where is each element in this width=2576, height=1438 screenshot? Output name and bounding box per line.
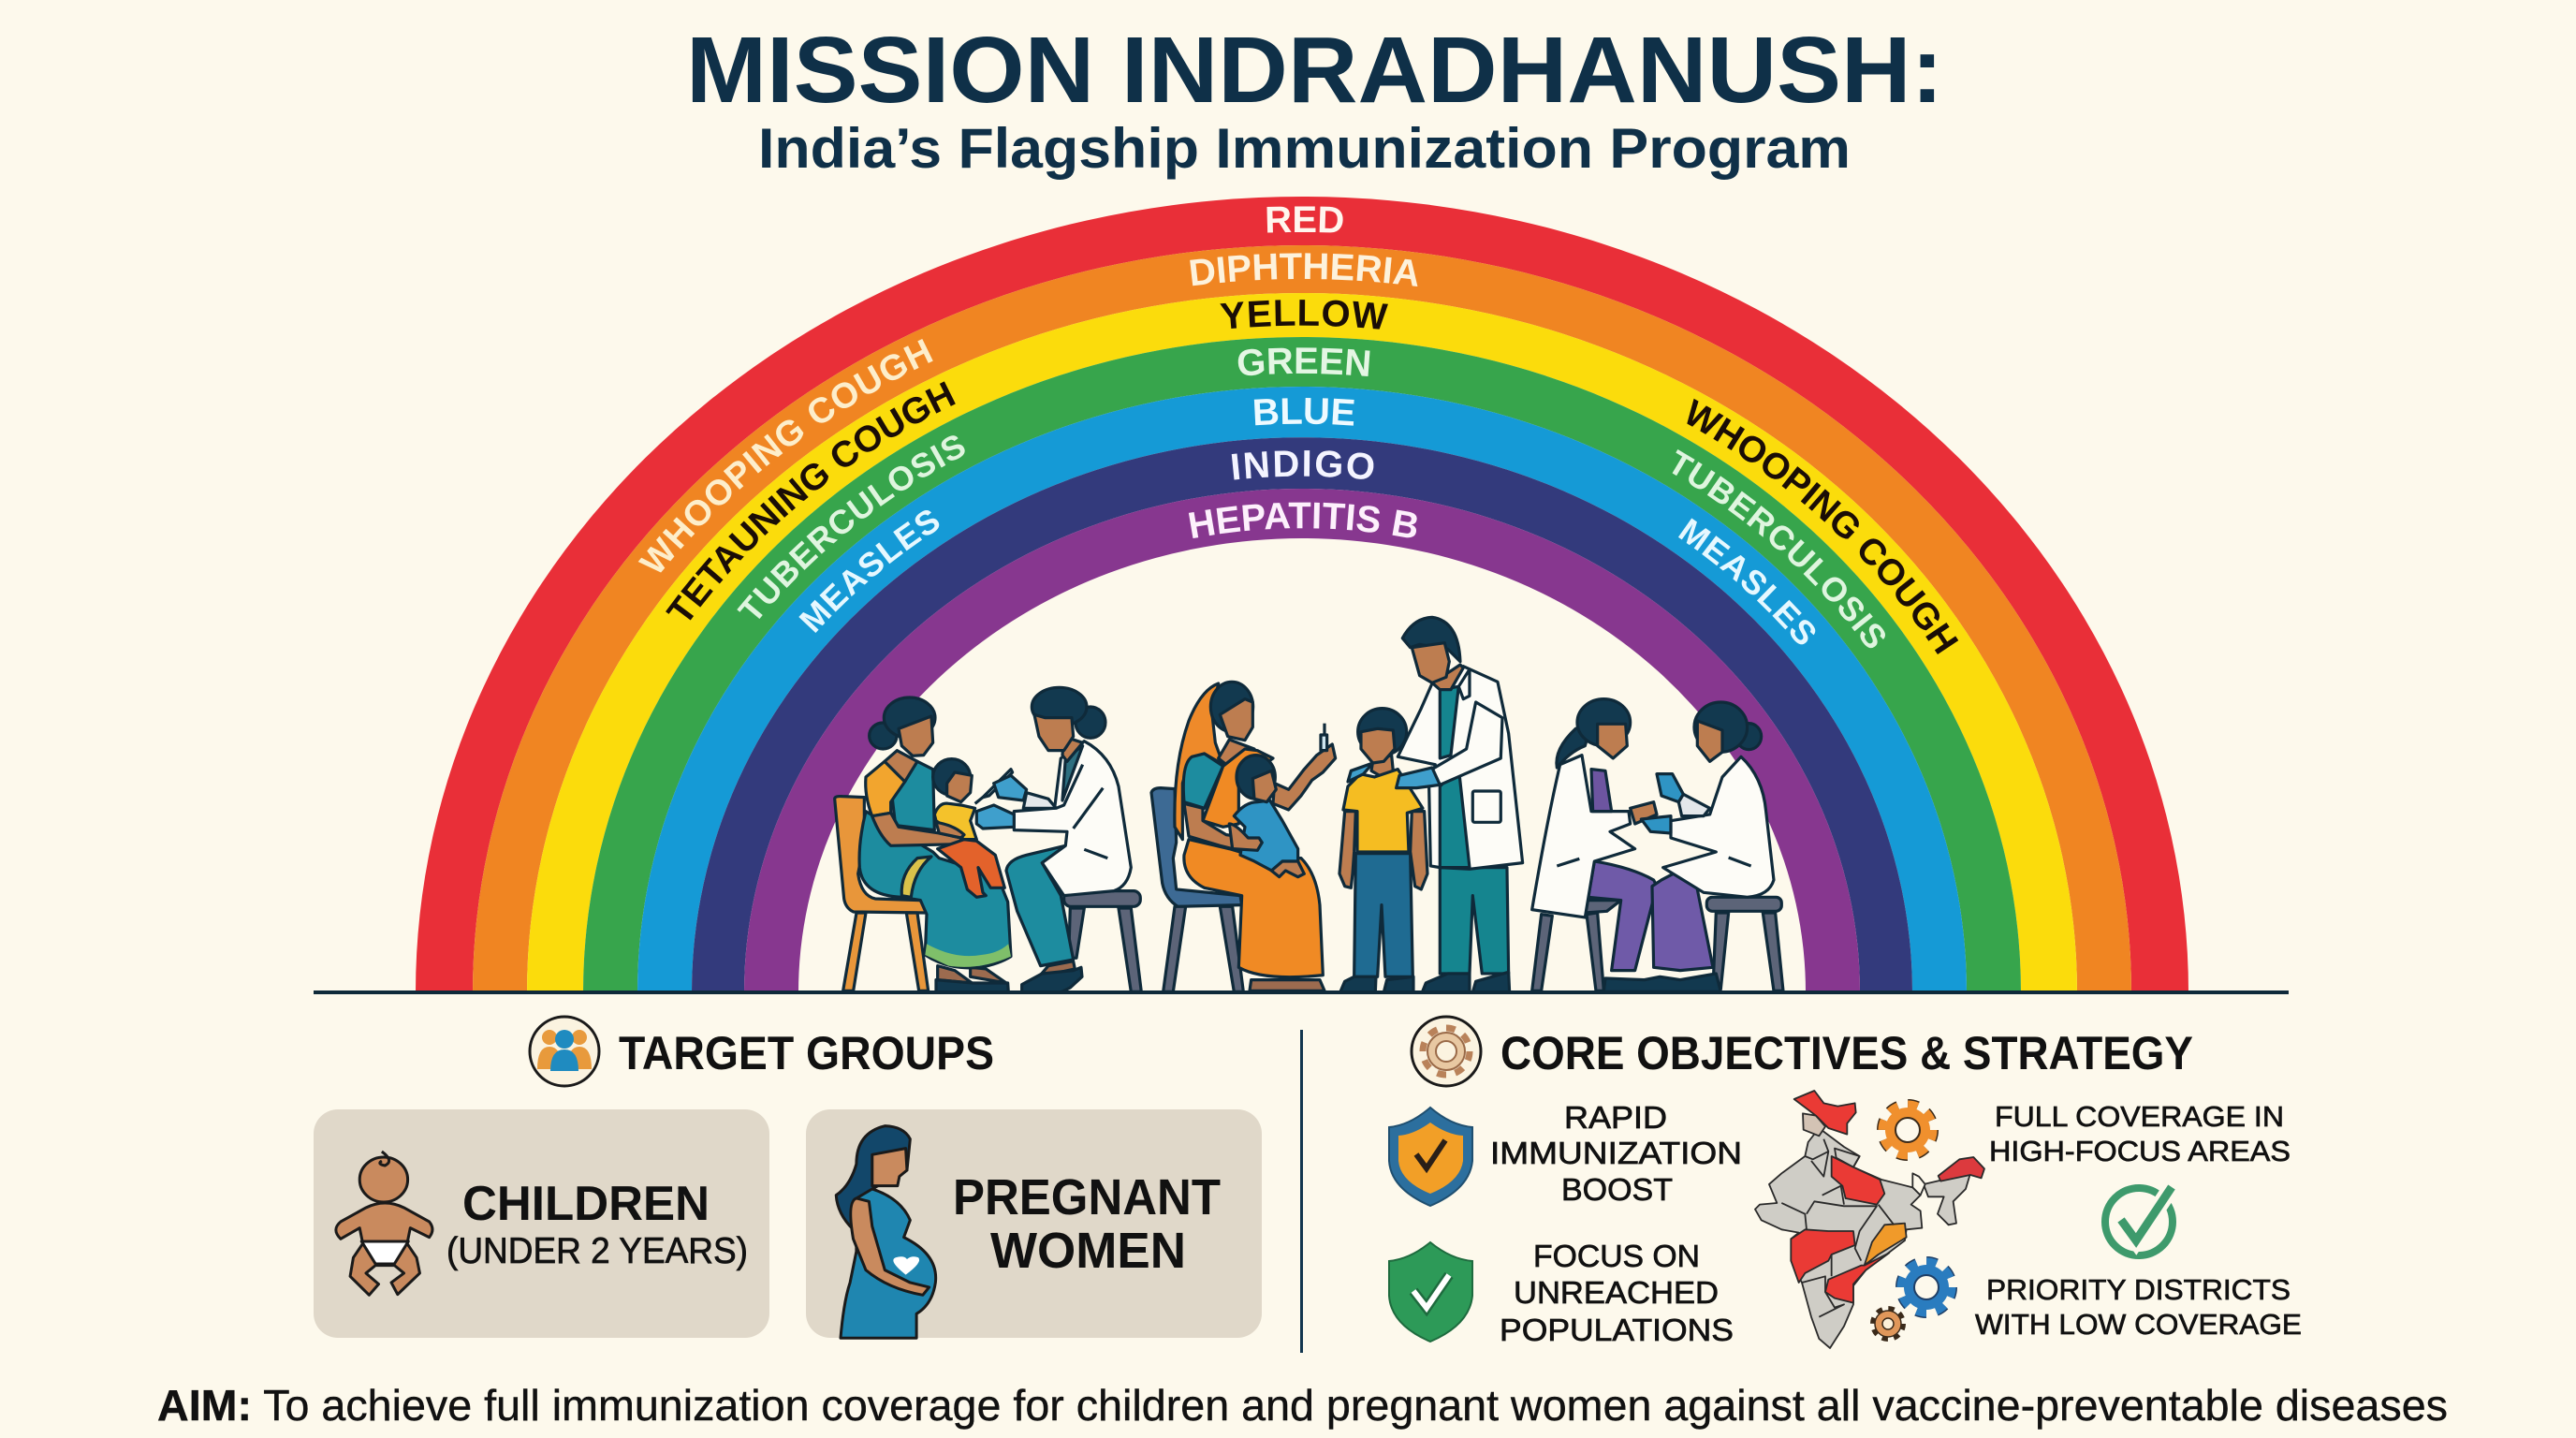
- band: blue: [637, 387, 1967, 992]
- card: children: [314, 1109, 769, 1338]
- band: green: [583, 337, 2021, 992]
- rainbow arch: [416, 197, 2188, 990]
- label: GREEN: GREEN: [1237, 347, 1370, 376]
- icon: group of people: [530, 1017, 599, 1086]
- text: priority districts: PRIORITY DISTRICTS: [1986, 1273, 2291, 1306]
- label: left whooping cough: WHOOPING COUGH: [638, 339, 933, 573]
- label: YELLOW: YELLOW: [1220, 300, 1388, 330]
- figure: standing doctor: [1348, 617, 1523, 992]
- figure: seated doctor with stethoscope: [1532, 699, 1657, 990]
- text: women: WOMEN: [990, 1223, 1186, 1279]
- panel: target groups: [314, 1017, 1262, 1338]
- text: rapid immunization boost: BOOST: [1561, 1172, 1673, 1207]
- illustration: health workers vaccinating mothers and children: [835, 617, 1783, 992]
- text: focus on unreached populations: [1500, 1239, 1734, 1347]
- text: under 2 years: (UNDER 2 YEARS): [446, 1231, 748, 1271]
- band: red: [416, 197, 2188, 992]
- text: priority districts: WITH LOW COVERAGE: [1975, 1308, 2302, 1341]
- icon: pregnant woman: [836, 1126, 936, 1338]
- figure: nurse with syringe: [975, 687, 1141, 992]
- figure: standing child: [1339, 709, 1427, 992]
- label: DIPHTHERIA: DIPHTHERIA: [1190, 253, 1417, 286]
- text: rapid immunization boost: IMMUNIZATION: [1490, 1136, 1742, 1170]
- text: children: CHILDREN: [462, 1177, 710, 1231]
- heading: core objectives: CORE OBJECTIVES & STRATEGY: [1500, 1027, 2193, 1079]
- figure: mother in orange saree with infant: [1151, 682, 1336, 991]
- ground line: [314, 990, 2289, 994]
- label: right measles: MEASLES: [1678, 519, 1816, 644]
- icon: green shield: [1389, 1242, 1472, 1342]
- text: pregnant: PREGNANT: [953, 1169, 1221, 1225]
- label: left tetauning cough: TETAUNING COUGH: [666, 381, 956, 620]
- panel: core objectives and strategy: [1389, 1017, 2302, 1348]
- heading: target groups: TARGET GROUPS: [619, 1027, 994, 1079]
- text: focus on unreached populations: FOCUS ON: [1533, 1239, 1700, 1273]
- section divider: [1300, 1030, 1303, 1353]
- band: orange: [473, 245, 2131, 992]
- label: left measles: MEASLES: [798, 510, 940, 633]
- icon: green check circle: [2105, 1187, 2173, 1255]
- text: rapid immunization boost: RAPID: [1564, 1100, 1667, 1135]
- band: indigo: [692, 437, 1912, 992]
- icon: gear emblem: [1412, 1017, 1481, 1086]
- label: HEPATITIS B: HEPATITIS B: [1189, 502, 1417, 538]
- text: focus on unreached populations: UNREACHED: [1514, 1275, 1719, 1310]
- label: right tuberculosis: TUBERCULOSIS: [1672, 449, 1885, 648]
- label: BLUE: BLUE: [1254, 398, 1354, 426]
- label: left tuberculosis: TUBERCULOSIS: [737, 435, 965, 619]
- label: INDIGO: INDIGO: [1232, 450, 1374, 479]
- icon: small gear: [1873, 1309, 1903, 1339]
- title: MISSION INDRADHANUSH:: [686, 18, 1943, 123]
- figure: seated doctor with vial: [1603, 702, 1783, 991]
- text: priority districts: [1975, 1273, 2302, 1341]
- icon: blue gear: [1901, 1262, 1952, 1313]
- text: full coverage: [1989, 1100, 2291, 1167]
- map: India with focus regions: [1755, 1091, 1984, 1348]
- text: rapid immunization boost: [1490, 1100, 1742, 1207]
- figure: seated mother with baby: [835, 697, 1011, 992]
- card: pregnant women: [806, 1109, 1262, 1338]
- icon: orange gear: [1882, 1105, 1933, 1155]
- label: right whooping cough: WHOOPING COUGH: [1687, 399, 1958, 654]
- icon: baby: [336, 1152, 432, 1295]
- aim statement: AIM: To achieve full immunization coverage for children and pregnant women against all vaccine-preventable diseases: [157, 1381, 2448, 1430]
- text: full coverage: FULL COVERAGE IN: [1995, 1100, 2284, 1133]
- text: focus on unreached populations: POPULATIONS: [1500, 1313, 1734, 1347]
- label: RED: RED: [1267, 206, 1343, 232]
- band: purple: [744, 489, 1860, 992]
- subtitle: India’s Flagship Immunization Program: [758, 117, 1851, 180]
- icon: orange and blue shield: [1389, 1108, 1472, 1206]
- text: full coverage: HIGH-FOCUS AREAS: [1989, 1135, 2291, 1167]
- band: yellow: [527, 293, 2077, 992]
